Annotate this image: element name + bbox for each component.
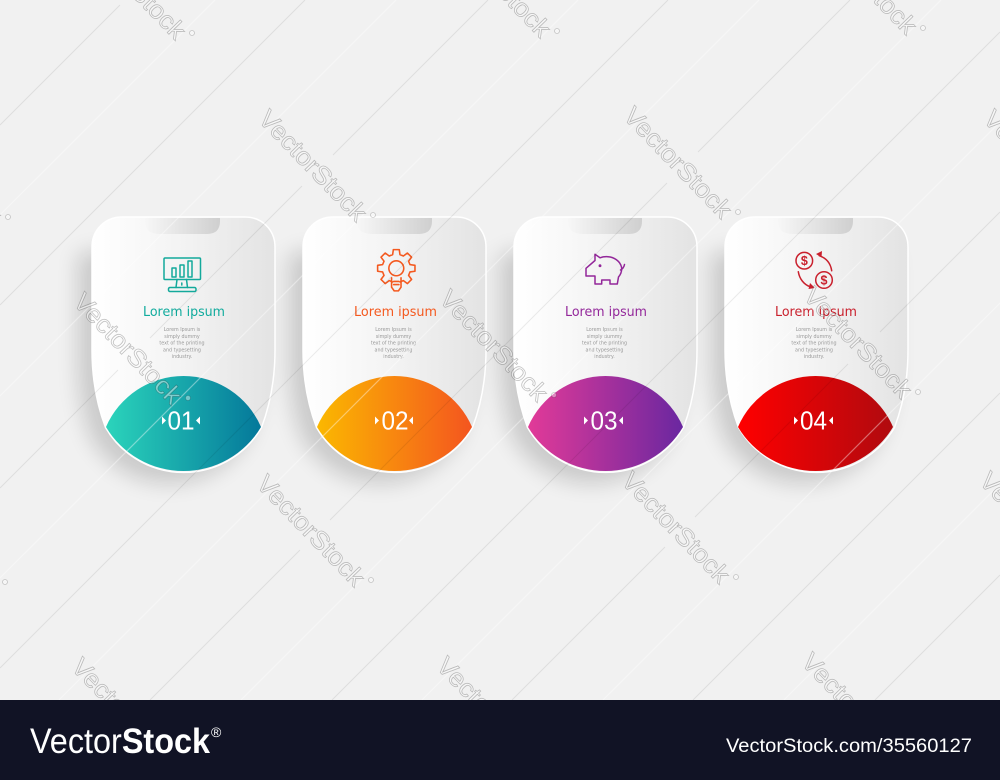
registered mark: ® (211, 724, 222, 740)
card 03 (514, 217, 697, 472)
heading 03: Lorem ipsum (565, 304, 647, 320)
text block 03: industry. (594, 354, 615, 360)
text block 02: text of the printing (371, 340, 416, 346)
icon: currency exchange (796, 251, 832, 289)
tab 02 (357, 218, 432, 234)
badge 04 (738, 376, 893, 471)
text block 01: and typesetting (163, 348, 201, 354)
number 01: 01 (168, 406, 194, 436)
icon: piggy bank (586, 254, 624, 284)
text block 02: industry. (383, 354, 404, 360)
watermarks: VectorStock (618, 102, 738, 224)
tab 03 (568, 218, 642, 234)
panel shadows (78, 251, 894, 483)
card 04 (725, 217, 908, 472)
watermarks: VectorStock (616, 467, 736, 589)
badge 03 (528, 376, 683, 471)
watermarks: VectorStock (253, 105, 373, 227)
number 02: 02 (382, 406, 408, 436)
watermarks: VectorStock (66, 653, 186, 775)
text block 03: and typesetting (586, 348, 623, 354)
text block 04: Lorem Ipsum is (796, 327, 833, 333)
icon: currency exchange: $ (801, 254, 808, 268)
heading 02: Lorem ipsum (354, 304, 437, 320)
icon: gear with light bulb (378, 250, 415, 291)
tab 01 (145, 218, 220, 234)
text block 01: Lorem Ipsum is (164, 327, 201, 333)
text block 04: simply dummy (796, 334, 832, 340)
panel: step 02 (303, 217, 486, 472)
text block 04: industry. (804, 354, 824, 360)
number 03: 03 (590, 406, 618, 436)
panel: step 03 (514, 217, 697, 472)
card 02 (303, 217, 486, 472)
badge 01 (106, 376, 261, 471)
text block 03: text of the printing (582, 340, 627, 346)
logo: VectorStock (30, 722, 210, 761)
text block 03: Lorem Ipsum is (586, 327, 623, 333)
text block 04: and typesetting (795, 348, 833, 354)
footer bar (0, 700, 1000, 780)
text block 03: simply dummy (587, 334, 622, 340)
text block 01: text of the printing (159, 340, 205, 346)
tab 04 (778, 218, 853, 234)
watermarks: VectorStock (68, 288, 188, 410)
image id: VectorStock.com/35560127 (726, 736, 972, 757)
icon: monitor with bar chart (164, 258, 200, 292)
badge 02 (317, 376, 472, 471)
panel: step 01 (92, 217, 275, 472)
watermarks: VectorStock (431, 652, 551, 774)
heading 01: Lorem ipsum (143, 304, 225, 320)
watermarks: VectorStock (251, 470, 371, 592)
panel: step 04 (725, 217, 908, 472)
watermarks: VectorStock (798, 282, 918, 404)
text block 01: industry. (172, 354, 192, 360)
text block 04: text of the printing (791, 340, 837, 346)
icon: currency exchange: $ (821, 274, 828, 288)
text block 02: Lorem Ipsum is (375, 327, 412, 333)
number 04: 04 (800, 406, 827, 436)
text block 02: and typesetting (375, 348, 412, 354)
watermarks: VectorStock (796, 648, 916, 770)
watermarks: VectorStock (434, 285, 554, 407)
heading 04: Lorem ipsum (775, 304, 857, 320)
card 01 (92, 217, 275, 472)
text block 02: simply dummy (376, 334, 411, 340)
text block 01: simply dummy (164, 334, 200, 340)
